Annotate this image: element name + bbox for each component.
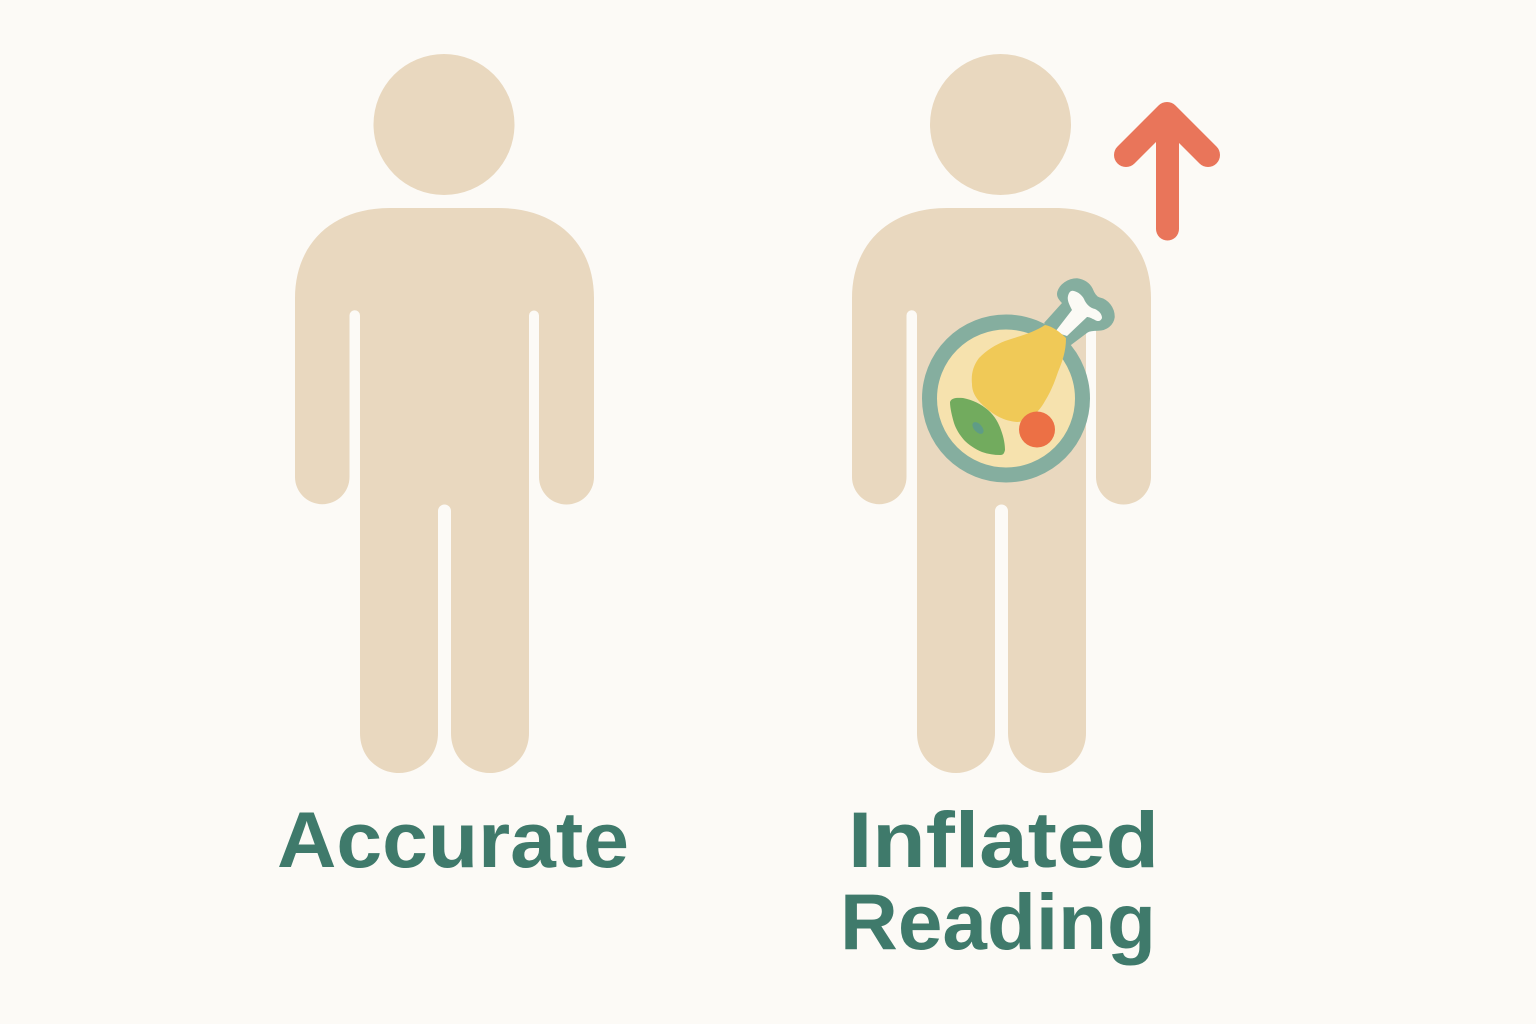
- icon: tomato: [1019, 412, 1055, 448]
- icon: leaf: [950, 398, 1005, 455]
- icon: plate with food: [930, 279, 1114, 475]
- icon: bone outline: [1045, 279, 1114, 347]
- head: accurate person: [374, 54, 514, 195]
- figure: accurate person: [295, 54, 594, 773]
- label: accurate: Accurate: [277, 795, 629, 884]
- label: inflated reading: [840, 795, 1159, 966]
- label: inflated reading: Inflated: [848, 795, 1159, 884]
- body: accurate person: [295, 208, 594, 773]
- head: inflated person: [930, 54, 1071, 195]
- body: inflated person: [852, 208, 1151, 773]
- figure: inflated person: [852, 54, 1151, 773]
- icon: chicken drumstick: [972, 325, 1066, 422]
- arrow: up: [1126, 114, 1208, 229]
- icon: plate: [930, 322, 1082, 475]
- icon: bone: [1055, 291, 1102, 336]
- label: inflated reading: Reading: [840, 877, 1156, 966]
- icon: leaf spot: [970, 420, 986, 436]
